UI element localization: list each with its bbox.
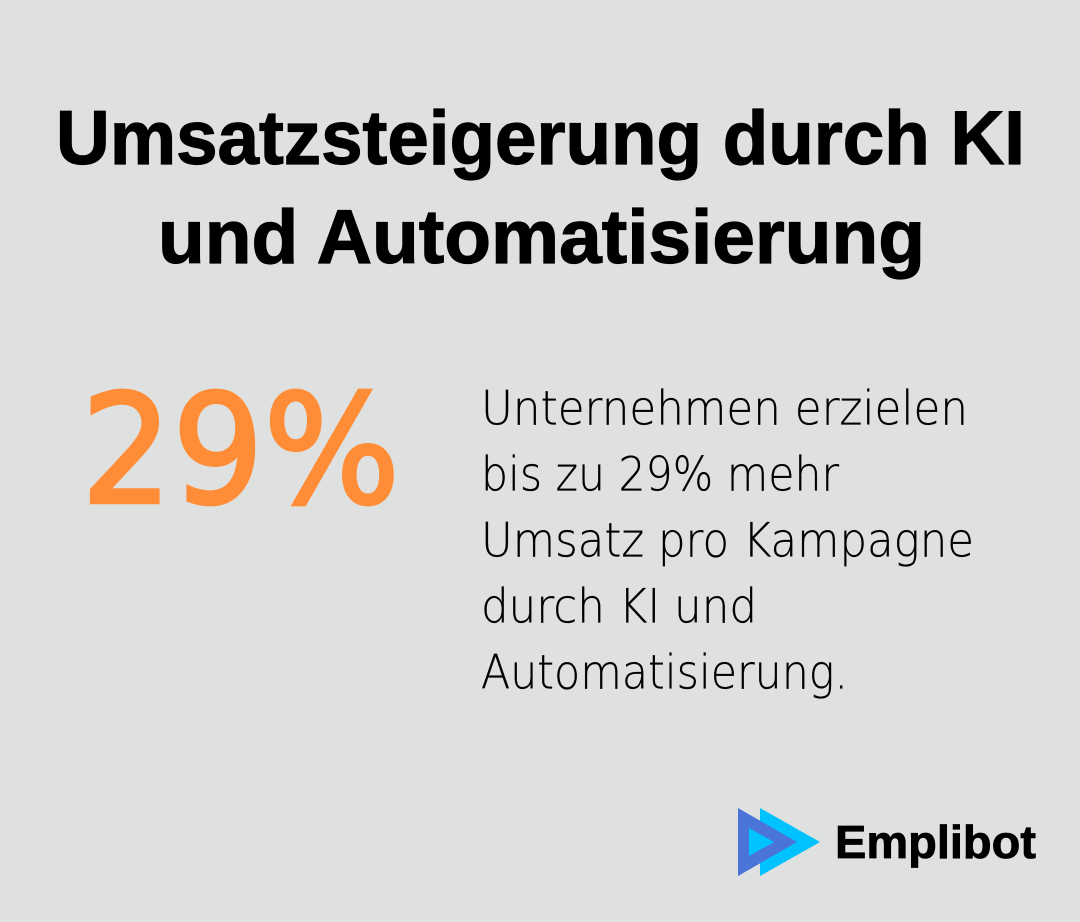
title: [56, 96, 1025, 280]
description text: Automatisierung.: [481, 646, 848, 700]
description text: Umsatz pro Kampagne: [481, 514, 974, 568]
title: Umsatzsteigerung durch KI: [56, 96, 1025, 181]
title: und Automatisierung: [158, 195, 925, 280]
icon: play triangles: [738, 808, 820, 876]
description text: Unternehmen erzielen: [481, 382, 968, 436]
description text: durch KI und: [481, 580, 757, 634]
description text: bis zu 29% mehr: [481, 448, 840, 502]
description text: [481, 382, 974, 700]
wordmark: Emplibot: [835, 816, 1036, 868]
big statistic: 29%: 29%: [81, 362, 400, 538]
logo: Emplibot: [738, 808, 1036, 876]
